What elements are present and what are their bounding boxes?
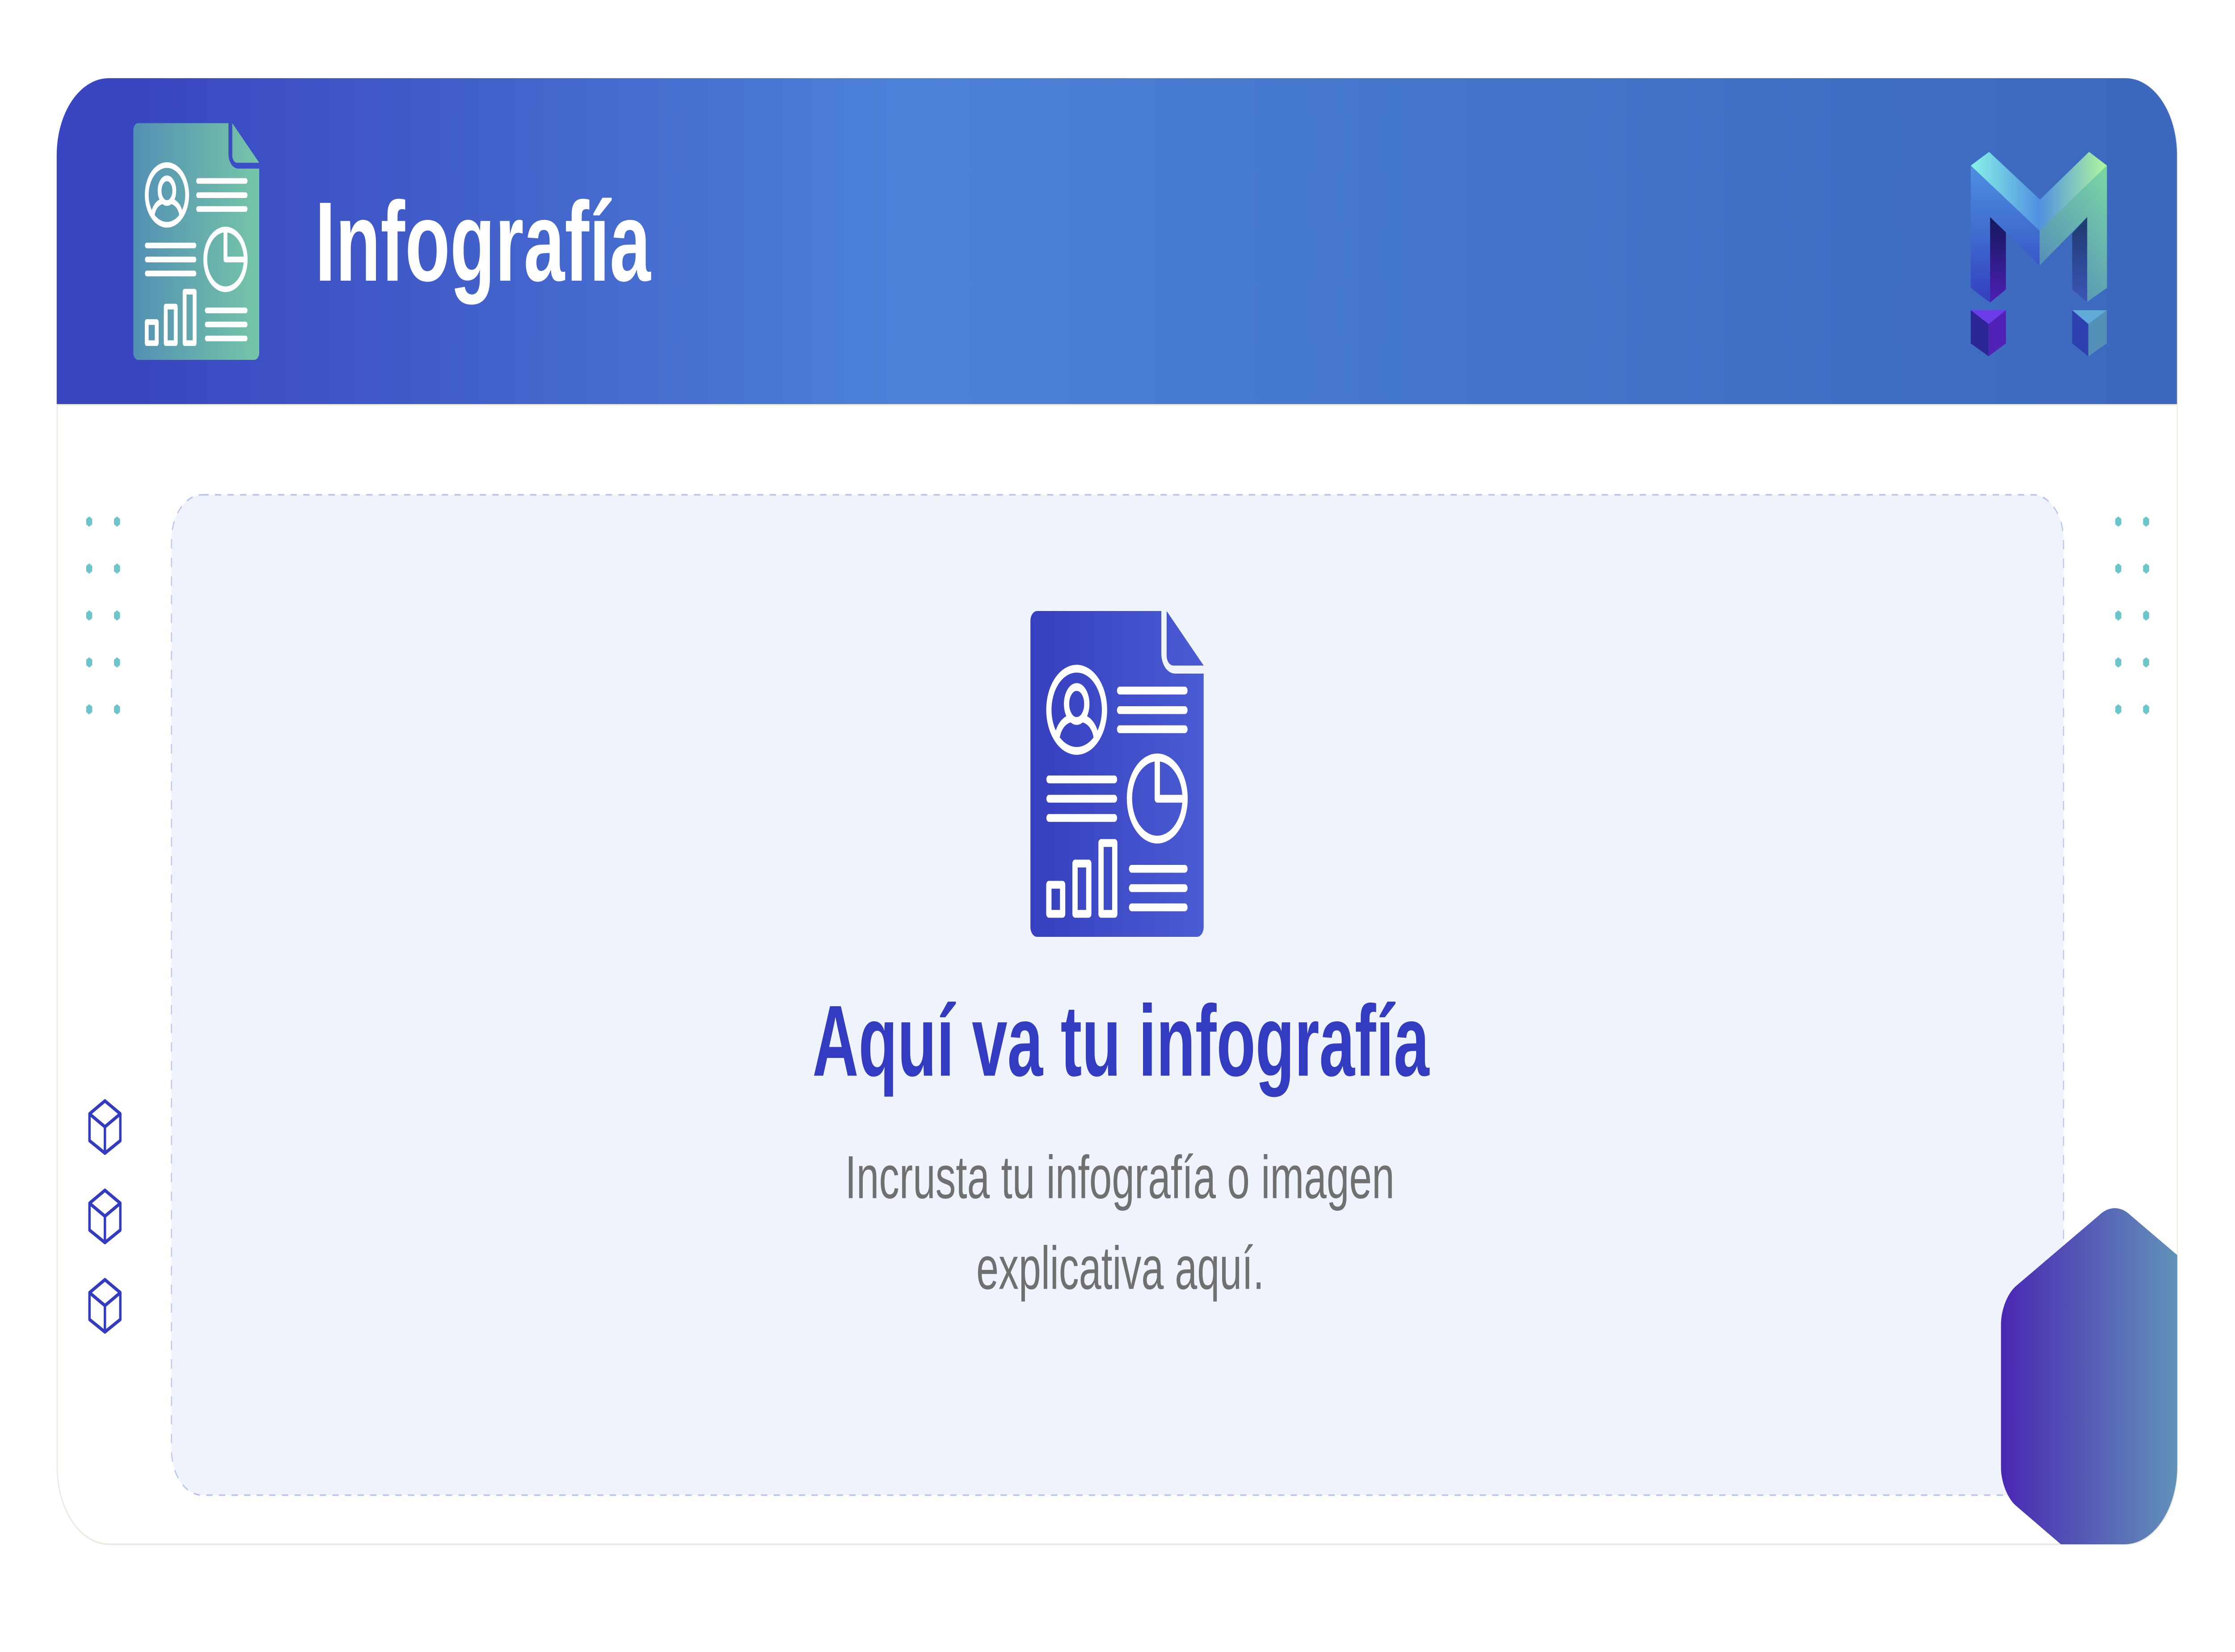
text block: description [845,1143,1395,1302]
icon: main document [1030,611,1204,937]
decoration: corner hexagon [2001,1208,2177,1544]
panel: placeholder [172,495,2063,1495]
decoration: right dots [2115,517,2149,714]
logo: M [1971,152,2107,356]
decoration: left dots [86,517,120,714]
text block: description: explicativa aquí. [976,1234,1264,1302]
heading: Aquí va tu infografía [813,984,1430,1097]
header band [57,78,2177,405]
text block: description: Incrusta tu infografía o imagen [845,1143,1395,1211]
icon: header document [133,123,259,360]
title: Infografía [315,178,651,305]
icon: cubes [89,1101,120,1332]
